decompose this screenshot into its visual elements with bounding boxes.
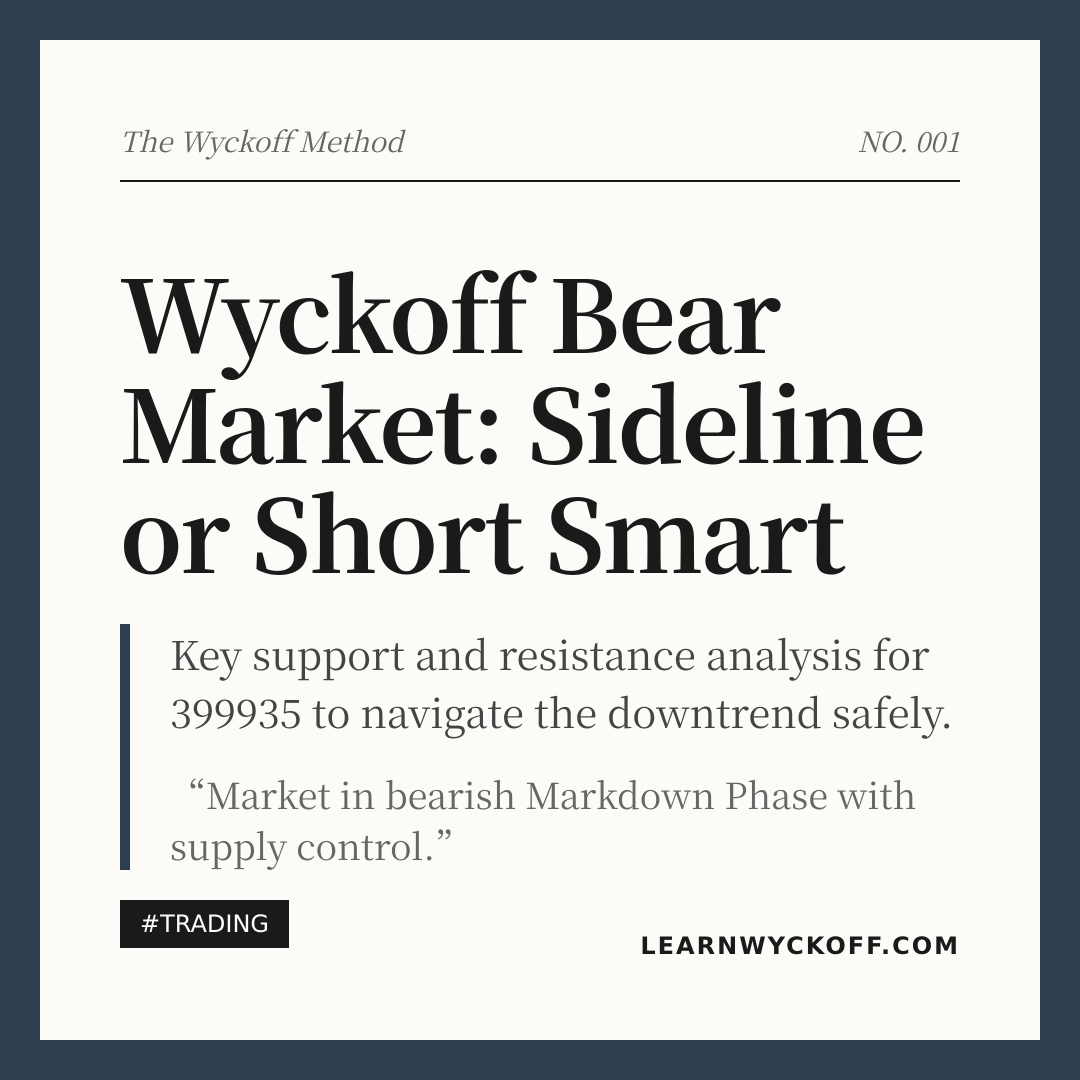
title xyxy=(120,238,924,602)
quote: supply control.” xyxy=(170,820,471,871)
quote xyxy=(170,769,916,871)
subtitle: Key support and resistance analysis for xyxy=(170,625,929,682)
accent bar xyxy=(120,624,130,870)
header: series name: The Wyckoff Method xyxy=(120,121,403,161)
title: or Short Smart xyxy=(120,458,844,602)
subtitle: 399935 to navigate the downtrend safely. xyxy=(170,683,953,740)
title: Wyckoff Bear xyxy=(120,238,780,382)
tag: #TRADING xyxy=(120,900,289,948)
subtitle xyxy=(170,625,953,740)
tag: #TRADING: #TRADING xyxy=(140,910,269,938)
header rule xyxy=(120,180,960,182)
site url: LEARNWYCKOFF.COM xyxy=(640,932,960,960)
header: issue number: NO. 001 xyxy=(857,121,960,161)
title: Market: Sideline xyxy=(120,348,924,492)
quote: “Market in bearish Markdown Phase with xyxy=(170,769,916,820)
